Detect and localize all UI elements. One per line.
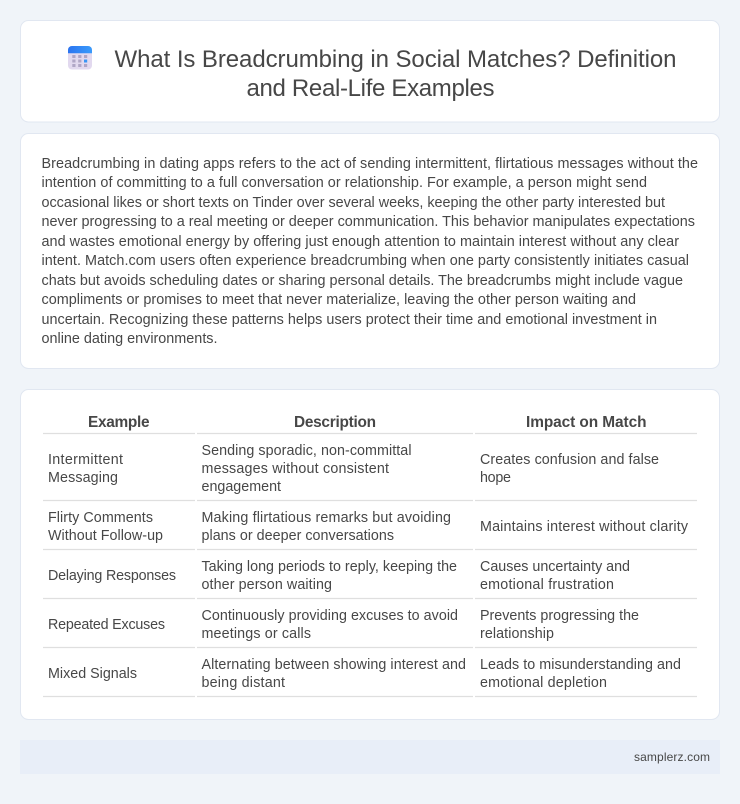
table row: delaying responses: emotional frustration	[480, 577, 614, 593]
table row: flirty comments: Without Follow-up	[48, 528, 163, 544]
table row: repeated excuses: Prevents progressing the	[480, 608, 639, 624]
table row: repeated excuses: Continuously providing excuses to avoid	[202, 608, 458, 624]
text block: explanation paragraph	[42, 156, 698, 347]
title	[114, 46, 676, 102]
text block: explanation paragraph: and wastes emotional energy by offering just enough attention to maintain interest without any clear	[42, 234, 679, 250]
text block: explanation paragraph: compliments or promises to meet that never materialize, leaving the other person waiting and	[42, 292, 636, 308]
table row: flirty comments: plans or deeper conversations	[202, 528, 394, 544]
table row: flirty comments: Flirty Comments	[48, 510, 153, 526]
table row: intermittent messaging: Messaging	[48, 470, 118, 486]
table header row: Description	[294, 414, 376, 431]
table row: delaying responses	[43, 559, 697, 598]
footer bar	[20, 740, 720, 774]
panel: definition text	[20, 134, 720, 368]
table row: mixed signals: emotional depletion	[480, 675, 607, 691]
table row: flirty comments	[43, 510, 697, 550]
text block: explanation paragraph: Breadcrumbing in dating apps refers to the act of sending intermittent, flirtatious messages without the	[42, 156, 698, 172]
footer source text: samplerz.com	[634, 750, 710, 764]
text block: explanation paragraph: online dating environments.	[42, 331, 218, 347]
table row: intermittent messaging: hope	[480, 470, 511, 486]
table row: intermittent messaging	[43, 443, 697, 500]
table row: mixed signals: being distant	[202, 675, 285, 691]
text block: explanation paragraph: occasional likes or short texts on Tinder over several weeks, keeping the other party interested but	[42, 195, 665, 211]
table header row: Example	[88, 414, 150, 431]
table row: repeated excuses: meetings or calls	[202, 626, 311, 642]
text block: explanation paragraph: intent. Match.com users often experience breadcrumbing when one party consistently initiates casual	[42, 253, 689, 269]
table row: intermittent messaging: Creates confusion and false	[480, 452, 659, 468]
table row: delaying responses: Taking long periods to reply, keeping the	[202, 559, 457, 575]
text block: explanation paragraph: never progressing to a real meeting or deeper communication. This behavior manipulates expectations	[42, 214, 695, 230]
table row: intermittent messaging: messages without consistent	[202, 461, 389, 477]
title: What Is Breadcrumbing in Social Matches? Definition	[114, 46, 676, 73]
header panel	[20, 20, 720, 122]
table row: delaying responses: other person waiting	[202, 577, 332, 593]
table row: delaying responses: Causes uncertainty and	[480, 559, 630, 575]
title: and Real-Life Examples	[246, 75, 494, 102]
table row: intermittent messaging: Intermittent	[48, 452, 123, 468]
table header row: Impact on Match	[526, 414, 646, 431]
table row: flirty comments: Maintains interest without clarity	[480, 519, 689, 535]
table row: mixed signals: Mixed Signals	[48, 666, 137, 682]
table row: mixed signals: Leads to misunderstanding and	[480, 657, 681, 673]
table row: intermittent messaging: engagement	[202, 479, 281, 495]
table row: mixed signals: Alternating between showing interest and	[202, 657, 466, 673]
table row: flirty comments: Making flirtatious remarks but avoiding	[202, 510, 451, 526]
text block: explanation paragraph: uncertain. Recognizing these patterns helps users protect their time and emotional investment in	[42, 312, 657, 328]
table row: delaying responses: Delaying Responses	[48, 568, 176, 584]
table row: mixed signals	[43, 657, 697, 696]
table row: repeated excuses: Repeated Excuses	[48, 617, 165, 633]
table header row	[43, 414, 697, 434]
table row: intermittent messaging: Sending sporadic, non-committal	[202, 443, 412, 459]
table row: repeated excuses: relationship	[480, 626, 554, 642]
panel: examples table	[20, 390, 720, 720]
text block: explanation paragraph: chats but avoids scheduling dates or sharing personal details. The breadcrumbs might include vague	[42, 273, 683, 289]
text block: explanation paragraph: intention of committing to a full conversation or relationship. For example, a person might send	[42, 175, 647, 191]
icon: calendar	[68, 46, 92, 70]
table row: repeated excuses	[43, 608, 697, 648]
